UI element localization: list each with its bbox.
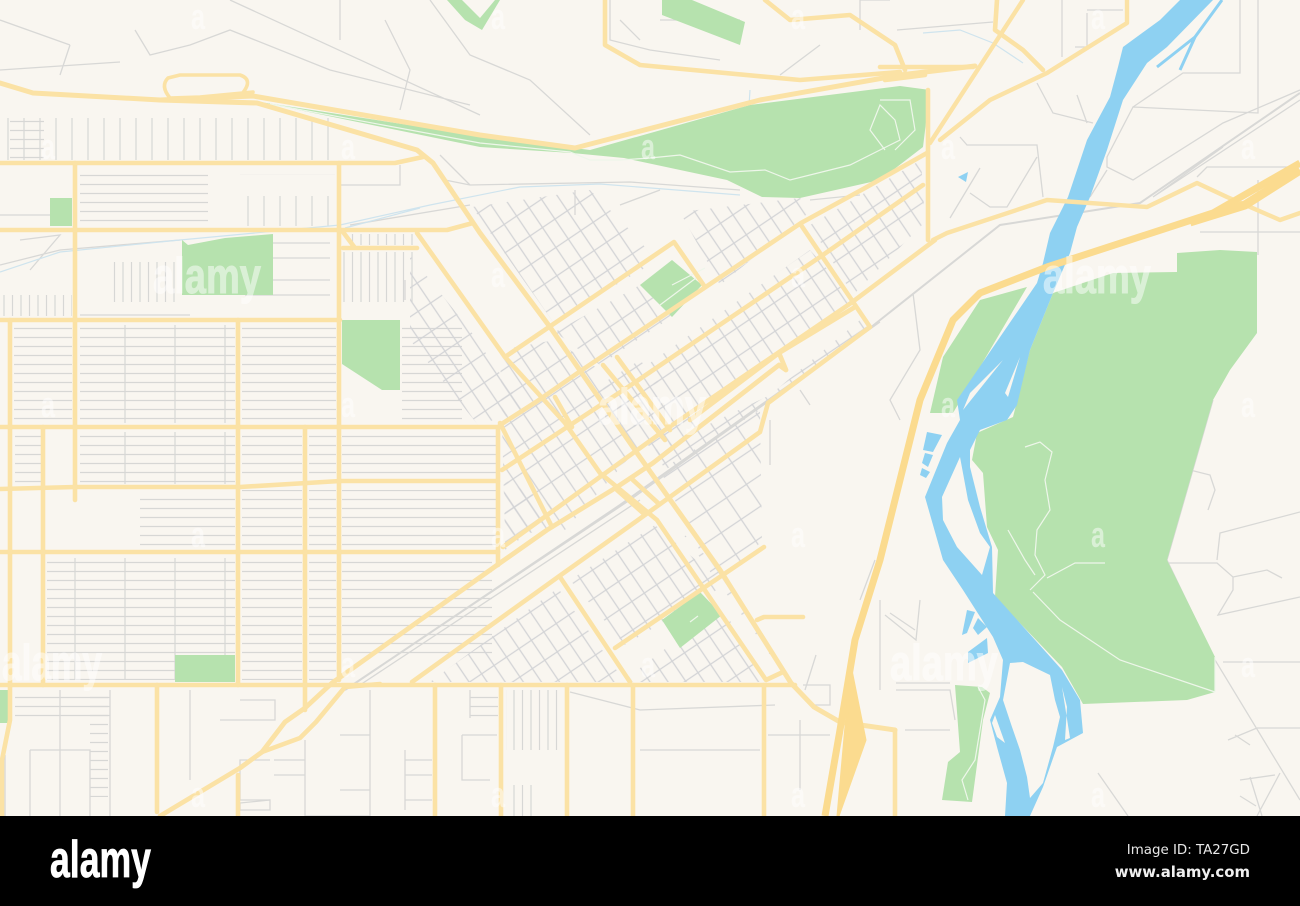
footer bar — [0, 816, 1300, 906]
park: riverside north — [260, 86, 930, 198]
watermarks: a — [791, 514, 806, 555]
watermarks: a — [791, 254, 806, 295]
watermarks: alamy — [2, 635, 102, 691]
watermarks: a — [1091, 514, 1106, 555]
watermarks: a — [491, 254, 506, 295]
watermarks: a — [941, 384, 956, 425]
watermarks: a — [341, 384, 356, 425]
image id: Image ID: TA27GD — [1127, 843, 1250, 858]
website: www.alamy.com — [1115, 863, 1250, 881]
watermarks: alamy — [153, 248, 261, 304]
watermarks: a — [341, 126, 356, 167]
watermarks: a — [1241, 644, 1256, 685]
canals — [0, 30, 1023, 272]
watermarks: a — [641, 126, 656, 167]
watermarks: a — [41, 126, 56, 167]
watermarks: a — [791, 774, 806, 815]
watermarks: a — [491, 514, 506, 555]
watermarks: a — [1241, 126, 1256, 167]
watermarks: alamy — [890, 635, 998, 691]
river — [925, 0, 1213, 816]
street grids: downtown diagonal blocks — [410, 160, 925, 682]
watermarks: a — [1241, 384, 1256, 425]
watermarks: alamy — [598, 379, 706, 435]
river islands and docks — [920, 0, 1222, 798]
watermarks: a — [41, 384, 56, 425]
watermarks: a — [941, 126, 956, 167]
watermarks: a — [341, 644, 356, 685]
watermarks: a — [191, 774, 206, 815]
park trails — [270, 100, 1215, 800]
watermarks: alamy — [1043, 248, 1151, 304]
watermarks: a — [491, 774, 506, 815]
watermarks: a — [1091, 774, 1106, 815]
watermarks: a — [641, 644, 656, 685]
alamy logo: alamy — [50, 831, 151, 889]
motorway — [825, 163, 1300, 816]
street grids: west side blocks — [0, 118, 564, 816]
watermarks: a — [191, 514, 206, 555]
park: large east — [972, 250, 1257, 704]
